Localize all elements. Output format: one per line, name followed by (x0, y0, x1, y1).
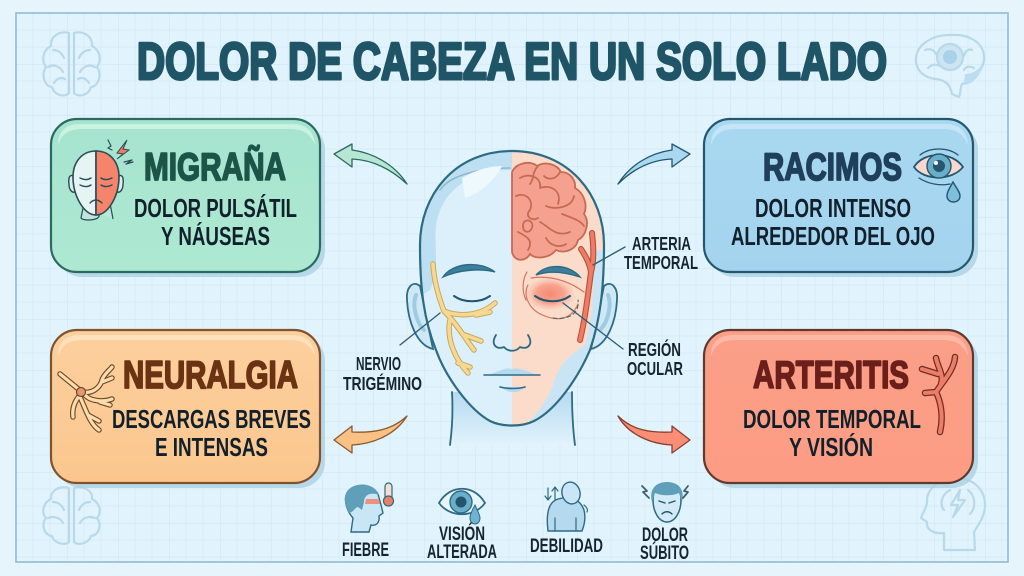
label: región ocular: OCULAR (627, 359, 683, 379)
text: arteritis description: Y VISIÓN (789, 432, 873, 462)
icon: decorative brain top left (43, 32, 100, 95)
temporal artery (580, 233, 593, 340)
text: fiebre: FIEBRE (342, 540, 389, 561)
label: arteria temporal: TEMPORAL (624, 253, 698, 273)
symptom: visión alterada (427, 489, 497, 563)
arrow: to racimos (618, 144, 690, 184)
neck (450, 392, 575, 445)
icon: decorative brain bottom left (43, 487, 100, 544)
label: región ocular (627, 339, 683, 379)
central head illustration (407, 148, 617, 445)
icon: decorative brain with eye top right (916, 35, 984, 97)
icon: eye with tear (439, 489, 485, 524)
eyebrows and eyes (443, 265, 580, 301)
text: debilidad: DEBILIDAD (530, 536, 603, 557)
heading: racimos: RACIMOS (763, 146, 902, 189)
arrow: to migraña (334, 144, 407, 184)
leader line: ocular region (563, 303, 623, 349)
label: arteria temporal (624, 234, 698, 273)
label: nervio trigémino: NERVIO (356, 354, 401, 374)
symptom: dolor súbito (640, 482, 689, 564)
text: visión alterada: ALTERADA (427, 542, 497, 563)
text: racimos description (731, 193, 935, 251)
icon: neuron (60, 367, 112, 430)
text: neuralgia description (112, 404, 311, 462)
text: visión alterada: VISIÓN (439, 523, 485, 545)
icon: drooping person (545, 480, 587, 531)
icon: teary eye (914, 149, 963, 202)
label: nervio trigémino: TRIGÉMINO (343, 373, 422, 394)
text: dolor súbito: SÚBITO (640, 542, 689, 564)
panel: migraña (51, 119, 325, 277)
text: arteritis description: DOLOR TEMPORAL (743, 404, 921, 434)
text: migraña description: Y NÁUSEAS (161, 221, 270, 251)
ears (407, 284, 617, 349)
text: racimos description: DOLOR INTENSO (755, 193, 911, 223)
text: arteritis description (743, 404, 921, 462)
text: neuralgia description: DESCARGAS BREVES (112, 404, 311, 434)
text: dolor súbito: DOLOR (642, 525, 688, 546)
text: neuralgia description: E INTENSAS (155, 432, 268, 462)
heading: neuralgia: NEURALGIA (123, 354, 298, 397)
nose (494, 335, 530, 351)
panel: racimos (704, 119, 978, 277)
panel: arteritis (704, 330, 978, 488)
icon: decorative head with lightning bottom right (921, 478, 985, 550)
symptom: fiebre (342, 483, 394, 561)
icon: migraine head (69, 140, 133, 220)
label: arteria temporal: ARTERIA (632, 234, 691, 254)
text: racimos description: ALREDEDOR DEL OJO (731, 221, 935, 251)
text: dolor súbito (640, 525, 689, 564)
mouth (484, 369, 540, 392)
leader line: trigeminal nerve (400, 313, 440, 345)
brain (512, 163, 587, 260)
icon: head in pain (642, 482, 688, 522)
symptom: debilidad (530, 480, 603, 557)
icon: head with thermometer (345, 483, 394, 532)
face halves (415, 148, 607, 433)
label: región ocular: REGIÓN (628, 339, 681, 360)
eye pain region (523, 272, 584, 319)
leader line: temporal artery (593, 247, 625, 265)
arrow: to arteritis (618, 416, 690, 453)
head outline (420, 151, 604, 426)
trigeminal nerve (433, 264, 495, 373)
heading: arteritis: ARTERITIS (753, 354, 909, 397)
text: migraña description (134, 193, 297, 251)
heading: migraña: MIGRAÑA (144, 145, 286, 189)
icon: artery (922, 357, 955, 432)
arrow: to neuralgia (334, 416, 407, 453)
label: nervio trigémino (343, 354, 422, 394)
panel: neuralgia (51, 330, 325, 488)
text: visión alterada (427, 523, 497, 563)
text: migraña description: DOLOR PULSÁTIL (134, 193, 297, 223)
